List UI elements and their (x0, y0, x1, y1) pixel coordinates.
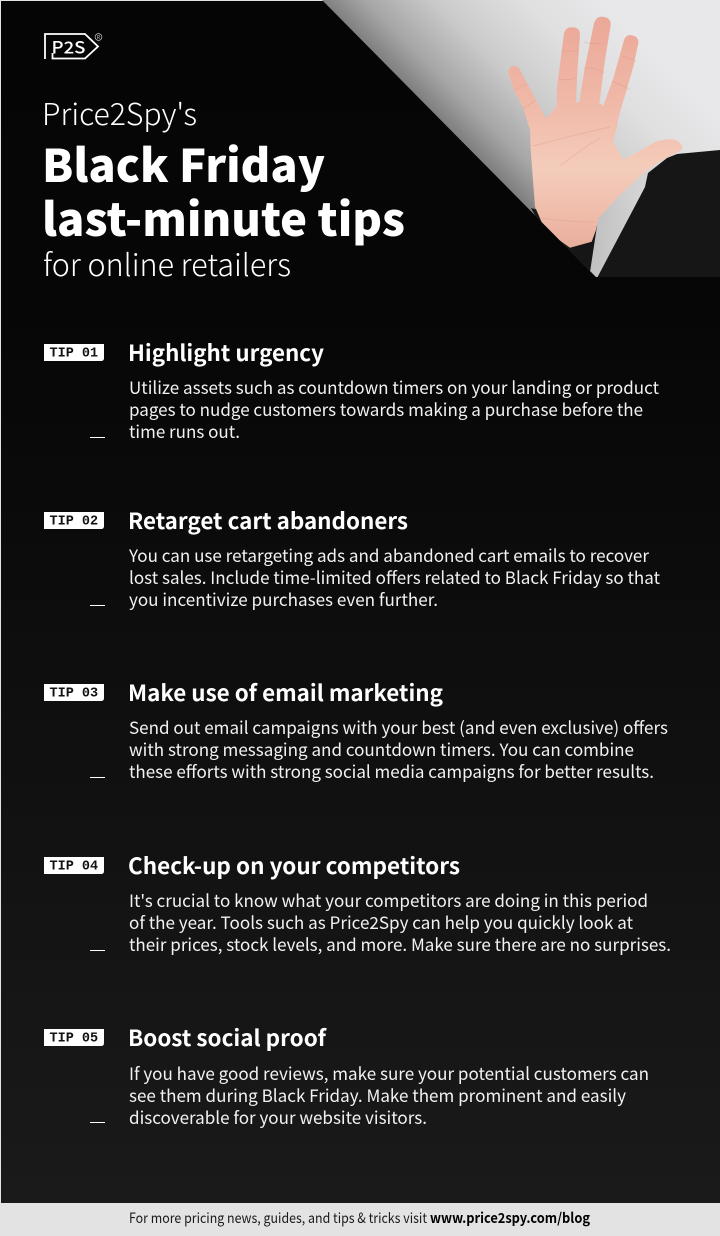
tip 02: you incentivize purchases even further. (129, 586, 438, 611)
tip 01: Highlight urgency (128, 336, 324, 368)
title: Black Friday (42, 130, 325, 196)
logo (45, 34, 102, 59)
tip 05: see them during Black Friday. Make them prominent and easily (129, 1082, 626, 1107)
tip 04: their prices, stock levels, and more. Make sure there are no surprises. (129, 931, 671, 956)
tip 03: these efforts with strong social media campaigns for better results. (129, 758, 654, 783)
tip 02: lost sales. Include time-limited offers related to Black Friday so that (129, 564, 661, 589)
footer: For more pricing news, guides, and tips & tricks visit (129, 1208, 428, 1228)
logo: R (97, 34, 101, 41)
tip 01: pages to nudge customers towards making a purchase before the (129, 396, 643, 421)
tip 05: If you have good reviews, make sure your potential customers can (129, 1060, 649, 1085)
tag: tip 02: TIP 02 (50, 514, 98, 530)
tag: tip 05 (44, 1029, 104, 1046)
tip 02 (44, 504, 661, 611)
tag: tip 03 (44, 684, 104, 702)
tag: tip 01: TIP 01 (50, 346, 98, 362)
tip 05: Boost social proof (128, 1021, 328, 1053)
tag: tip 04: TIP 04 (50, 860, 98, 874)
hero photo: raised hand (322, 0, 720, 280)
tip 03 (44, 676, 668, 783)
tip 04 (44, 849, 671, 956)
tip 02: You can use retargeting ads and abandoned cart emails to recover (128, 542, 649, 567)
tip 04: Check-up on your competitors (128, 849, 460, 881)
tip 01 (44, 336, 660, 443)
tag: tip 04 (44, 857, 104, 874)
title: last-minute tips (42, 184, 405, 250)
title: for online retailers (43, 241, 291, 285)
tag: tip 03: TIP 03 (50, 686, 98, 702)
tip 04: of the year. Tools such as Price2Spy can help you quickly look at (129, 909, 634, 934)
tip 03: Send out email campaigns with your best (and even exclusive) offers (129, 714, 668, 739)
tip 03: Make use of email marketing (128, 676, 443, 708)
tag: tip 05: TIP 05 (50, 1032, 98, 1046)
logo: P2S (52, 34, 86, 58)
tag: tip 02 (44, 512, 104, 530)
footer: www.price2spy.com/blog (430, 1208, 591, 1228)
tip 05 (44, 1021, 649, 1129)
tip 03: with strong messaging and countdown timers. You can combine (129, 736, 634, 761)
tip 02: Retarget cart abandoners (128, 504, 408, 536)
tip 05: discoverable for your website visitors. (129, 1104, 427, 1129)
title: Price2Spy's (42, 90, 197, 134)
title (42, 90, 405, 285)
tip 01: time runs out. (129, 418, 240, 443)
tip 01: Utilize assets such as countdown timers on your landing or product (129, 374, 660, 399)
tag: tip 01 (44, 344, 104, 362)
tip 04: It's crucial to know what your competitors are doing in this period (129, 887, 648, 912)
